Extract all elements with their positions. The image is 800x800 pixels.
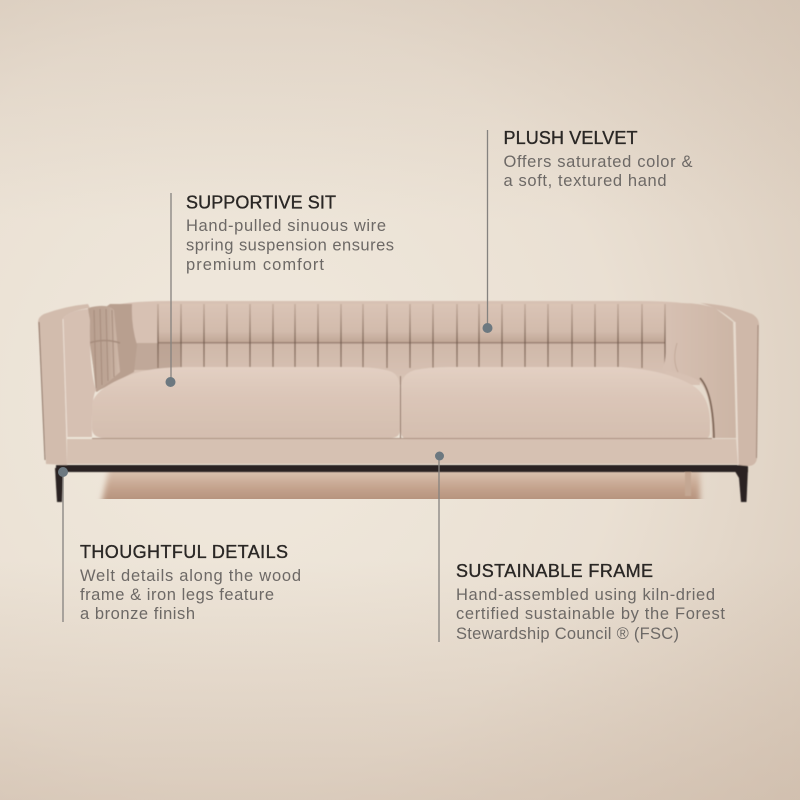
heading: SUPPORTIVE SIT (186, 192, 336, 212)
description: certified sustainable by the Forest (456, 605, 725, 623)
leader line and dot (482, 130, 492, 333)
heading: SUSTAINABLE FRAME (456, 561, 653, 581)
callout: thoughtful details (58, 467, 301, 623)
description (456, 586, 725, 643)
leader line and dot (435, 452, 444, 642)
description: a soft, textured hand (504, 172, 666, 190)
description: Offers saturated color & (504, 153, 692, 171)
description: a bronze finish (80, 605, 195, 623)
left seat cushion (92, 367, 400, 438)
sofa left arm (38, 304, 137, 465)
description: spring suspension ensures (186, 236, 394, 254)
sofa tufted back (100, 301, 700, 385)
description: Welt details along the wood (80, 567, 301, 585)
description (504, 153, 692, 190)
description: premium comfort (186, 256, 324, 274)
sofa base rail (67, 439, 738, 464)
description (186, 217, 394, 274)
floor shadow under sofa (98, 472, 704, 499)
right seat cushion (401, 367, 710, 440)
sofa right arm (663, 303, 759, 466)
callout: plush velvet (482, 128, 692, 333)
callout: supportive sit (166, 192, 394, 387)
leader line and dot (58, 467, 68, 622)
callout: sustainable frame (435, 452, 725, 643)
description: Hand-pulled sinuous wire (186, 217, 386, 235)
heading: PLUSH VELVET (504, 128, 638, 148)
sofa legs and iron frame (55, 465, 748, 502)
description (80, 567, 301, 623)
description: frame & iron legs feature (80, 586, 274, 604)
leader line and dot (166, 193, 176, 387)
sofa illustration (38, 301, 759, 502)
description: Hand-assembled using kiln-dried (456, 586, 715, 604)
description: Stewardship Council ® (FSC) (456, 625, 679, 643)
heading: THOUGHTFUL DETAILS (80, 542, 288, 562)
